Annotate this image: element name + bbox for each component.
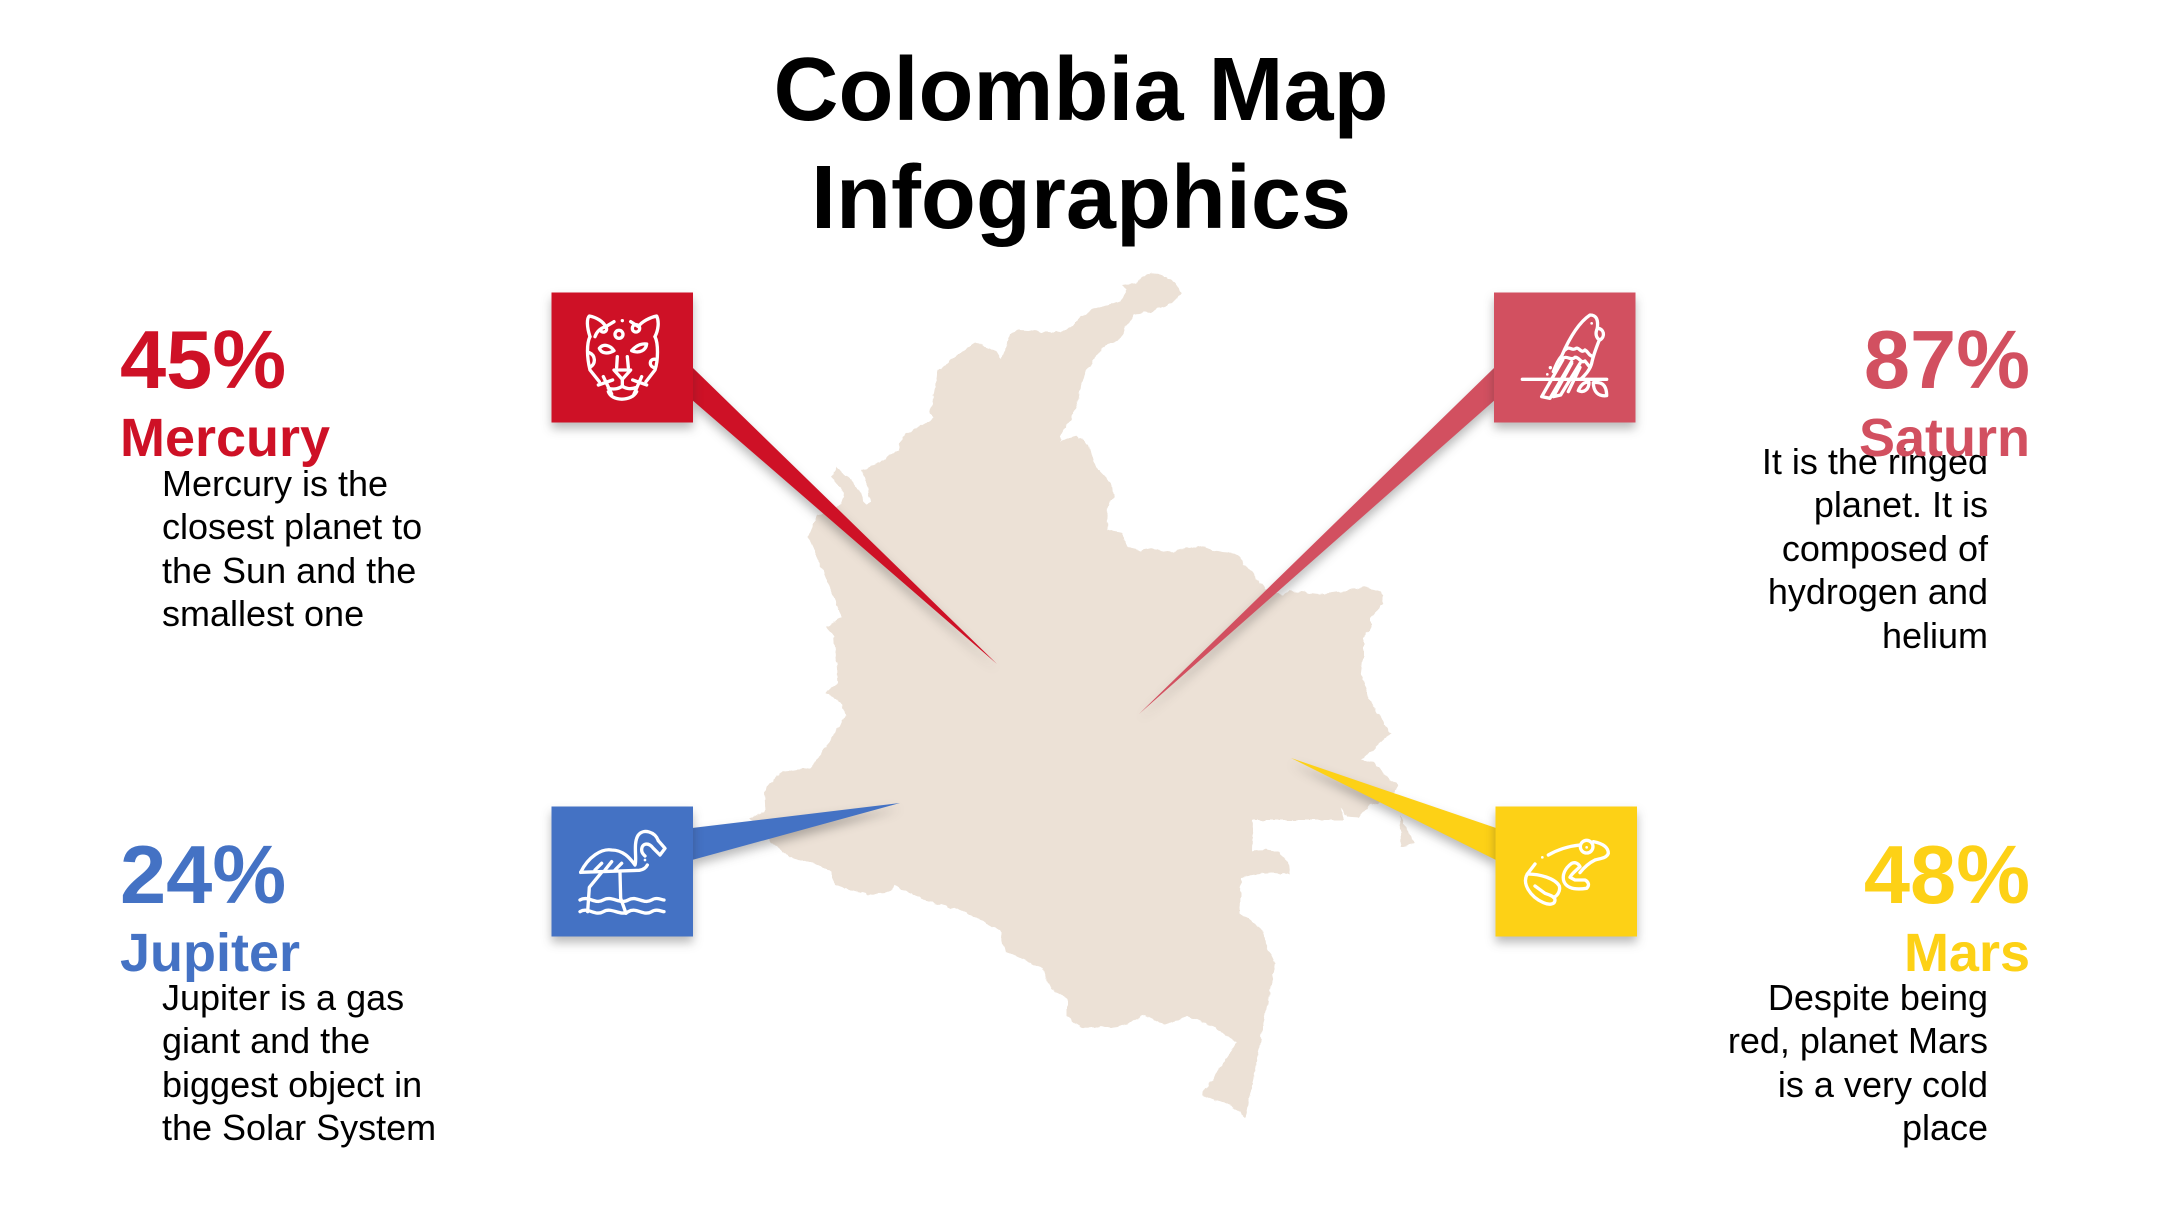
- description: Mercury: closest planet to: [162, 506, 422, 547]
- description: Jupiter: giant and the: [162, 1020, 370, 1061]
- description: Mars: is a very cold: [1778, 1064, 1988, 1105]
- icon: frog: [1526, 840, 1608, 904]
- name: Mars: Mars: [1904, 923, 2030, 983]
- map of Colombia: [750, 274, 1414, 1118]
- description: Saturn: It is the ringed: [1762, 441, 1988, 482]
- description: Saturn: helium: [1882, 615, 1988, 656]
- panel: Mercury: [120, 313, 422, 634]
- title: Infographics: [811, 148, 1351, 248]
- name: Saturn: Saturn: [1859, 408, 2030, 468]
- description: Saturn: [1762, 441, 1988, 656]
- pointer: Mercury: [693, 368, 997, 664]
- square: Jupiter: [552, 806, 693, 936]
- square: Saturn: [1494, 292, 1636, 422]
- percentage: Jupiter: 24%: [120, 828, 286, 921]
- panel: Mars: [1728, 828, 2030, 1148]
- description: Mercury: the Sun and the: [162, 550, 416, 591]
- description: Jupiter: [162, 977, 436, 1148]
- title: [773, 40, 1388, 248]
- description: Jupiter: the Solar System: [162, 1107, 436, 1148]
- description: Mercury: [162, 463, 422, 634]
- description: Mercury: Mercury is the: [162, 463, 388, 504]
- description: Jupiter: Jupiter is a gas: [162, 977, 404, 1018]
- panel: Jupiter: [120, 828, 436, 1148]
- description: Mercury: smallest one: [162, 593, 364, 634]
- description: Mars: Despite being: [1768, 977, 1988, 1018]
- pointer: Saturn: [1139, 368, 1494, 714]
- square: Mercury: [552, 292, 693, 422]
- icon: jaguar: [587, 316, 658, 399]
- icon: flamingo: [580, 831, 665, 913]
- percentage: Saturn: 87%: [1864, 313, 2030, 406]
- name: Jupiter: Jupiter: [120, 923, 300, 983]
- description: Saturn: composed of: [1782, 528, 1988, 569]
- description: Jupiter: biggest object in: [162, 1064, 422, 1105]
- percentage: Mercury: 45%: [120, 313, 286, 406]
- pointer: Jupiter: [692, 803, 900, 860]
- pointer: Mars: [1291, 758, 1496, 860]
- description: Saturn: hydrogen and: [1768, 571, 1988, 612]
- name: Mercury: Mercury: [120, 408, 330, 468]
- description: Mars: red, planet Mars: [1728, 1020, 1988, 1061]
- panel: Saturn: [1762, 313, 2030, 656]
- description: Mars: [1728, 977, 1988, 1148]
- icon: parrot: [1522, 315, 1607, 398]
- square: Mars: [1496, 806, 1637, 936]
- percentage: Mars: 48%: [1864, 828, 2030, 921]
- description: Mars: place: [1902, 1107, 1988, 1148]
- description: Saturn: planet. It is: [1814, 484, 1988, 525]
- title: Colombia Map: [773, 40, 1388, 140]
